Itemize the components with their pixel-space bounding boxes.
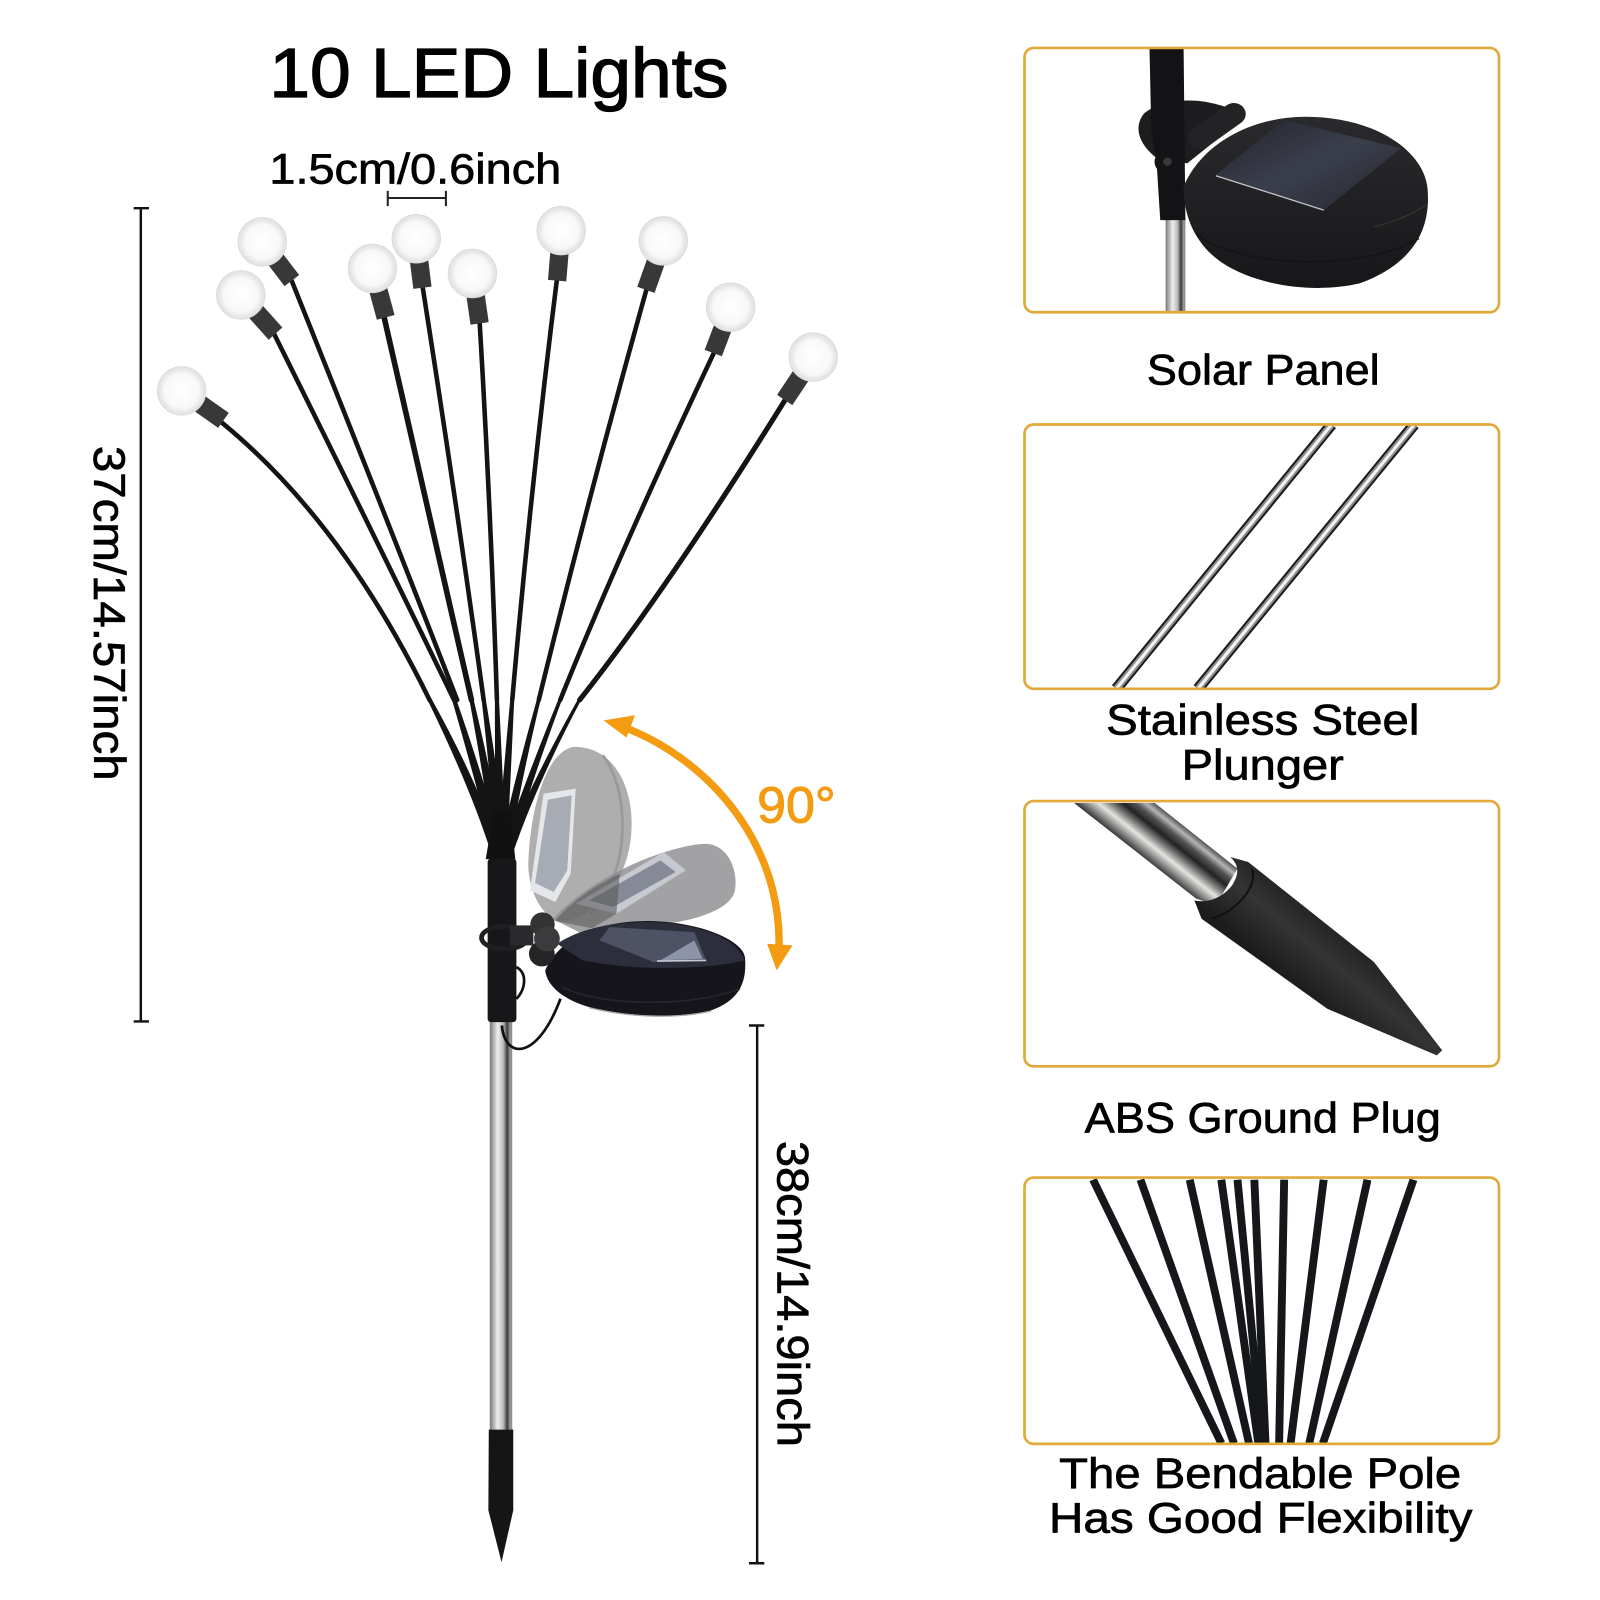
panel: solar panel [1024, 47, 1499, 317]
orange rotation arrow [603, 715, 793, 970]
height dimension: stake: 38cm/14.9inch [768, 1141, 819, 1447]
height dimension: lights [84, 208, 149, 1021]
caption: bendable pole: Has Good Flexibility [1049, 1495, 1473, 1543]
LED bulbs [158, 207, 837, 420]
height dimension: stake [749, 1026, 819, 1563]
panel: ABS ground plug [1024, 801, 1499, 1066]
caption: ABS ground plug: ABS Ground Plug [1085, 1095, 1441, 1143]
caption: stainless steel plunger: Stainless Steel [1106, 697, 1419, 745]
caption: bendable pole [1049, 1450, 1473, 1543]
rotating solar panel with 90 degree arrow [482, 715, 793, 1049]
panel: stainless steel plunger [1024, 424, 1499, 689]
90 degree label: 90° [757, 776, 836, 833]
title: 10 LED Lights [269, 34, 729, 112]
height dimension: lights: 37cm/14.57inch [84, 446, 135, 781]
caption: stainless steel plunger: Plunger [1182, 742, 1344, 790]
caption: stainless steel plunger [1106, 697, 1419, 790]
firefly light wires [220, 278, 786, 859]
panel: bendable pole [1024, 1178, 1499, 1444]
bulb width label: 1.5cm/0.6inch [269, 146, 561, 194]
caption: solar panel: Solar Panel [1147, 347, 1380, 395]
stainless pole and ground stake [488, 1020, 513, 1562]
caption: bendable pole: The Bendable Pole [1059, 1450, 1461, 1498]
